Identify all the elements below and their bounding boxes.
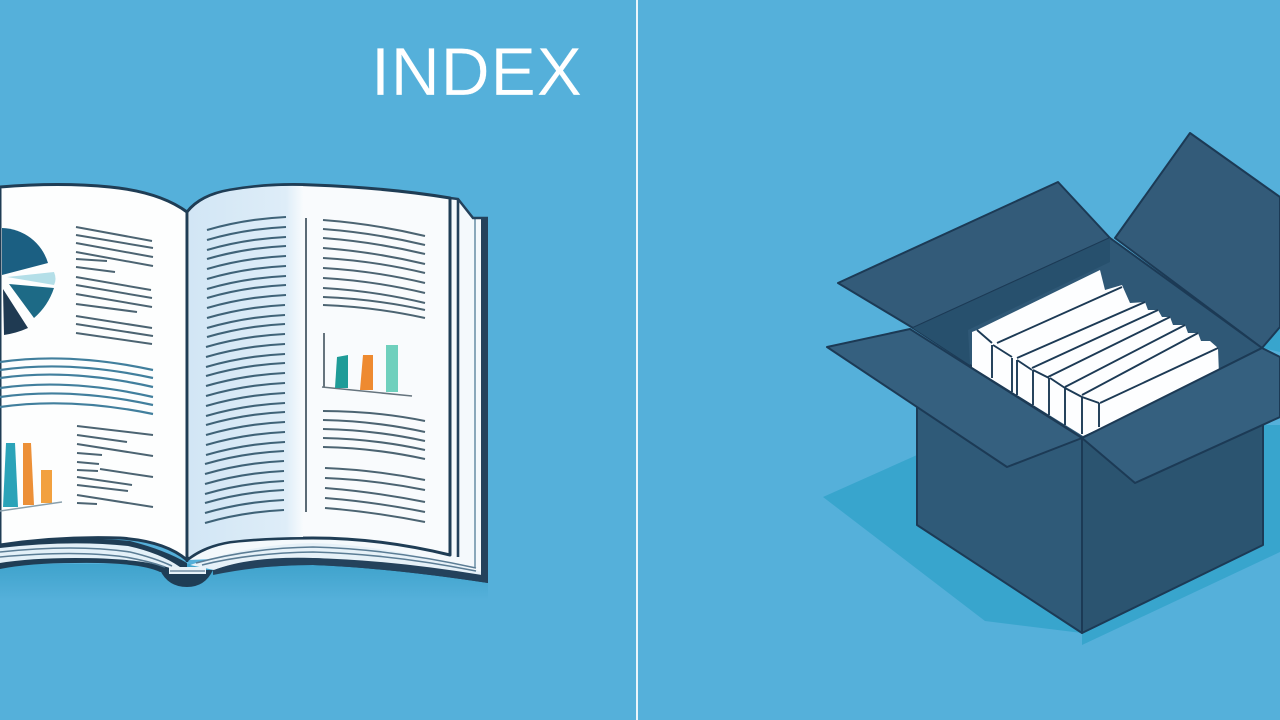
box right face [1082, 400, 1263, 633]
spine bump [160, 567, 213, 587]
right page column of text lines [205, 217, 286, 523]
title: INDEX: INDEX [371, 34, 582, 110]
right page gutter shading [189, 186, 303, 557]
centre divider line [636, 0, 638, 720]
box interior [913, 238, 1262, 438]
book ground shadow [0, 564, 488, 600]
box ground shadow [823, 327, 1280, 645]
flap: front right [1082, 348, 1280, 483]
right page text block, upper [323, 220, 425, 318]
illustration: open book [0, 184, 488, 600]
right page bar chart [322, 333, 412, 396]
back cover [213, 218, 488, 583]
spine line [186, 212, 188, 562]
page stack: right side [187, 198, 488, 583]
flap: back left [838, 182, 1110, 328]
left page text block, upper [76, 227, 153, 344]
left page text block, lower [77, 426, 153, 507]
left page [0, 184, 187, 560]
right page text block, lower [323, 411, 425, 522]
pie chart [2, 228, 56, 335]
illustration: open box of books [823, 133, 1280, 645]
right page [187, 185, 450, 560]
right page vertical rule [305, 218, 307, 512]
page stack: left side [0, 538, 187, 572]
flap: back right [1115, 133, 1280, 348]
flap: front left [827, 329, 1082, 467]
left page bar chart [0, 443, 62, 511]
stack of white books [972, 270, 1219, 436]
box left face [917, 395, 1082, 633]
left page wide text lines [0, 358, 153, 414]
